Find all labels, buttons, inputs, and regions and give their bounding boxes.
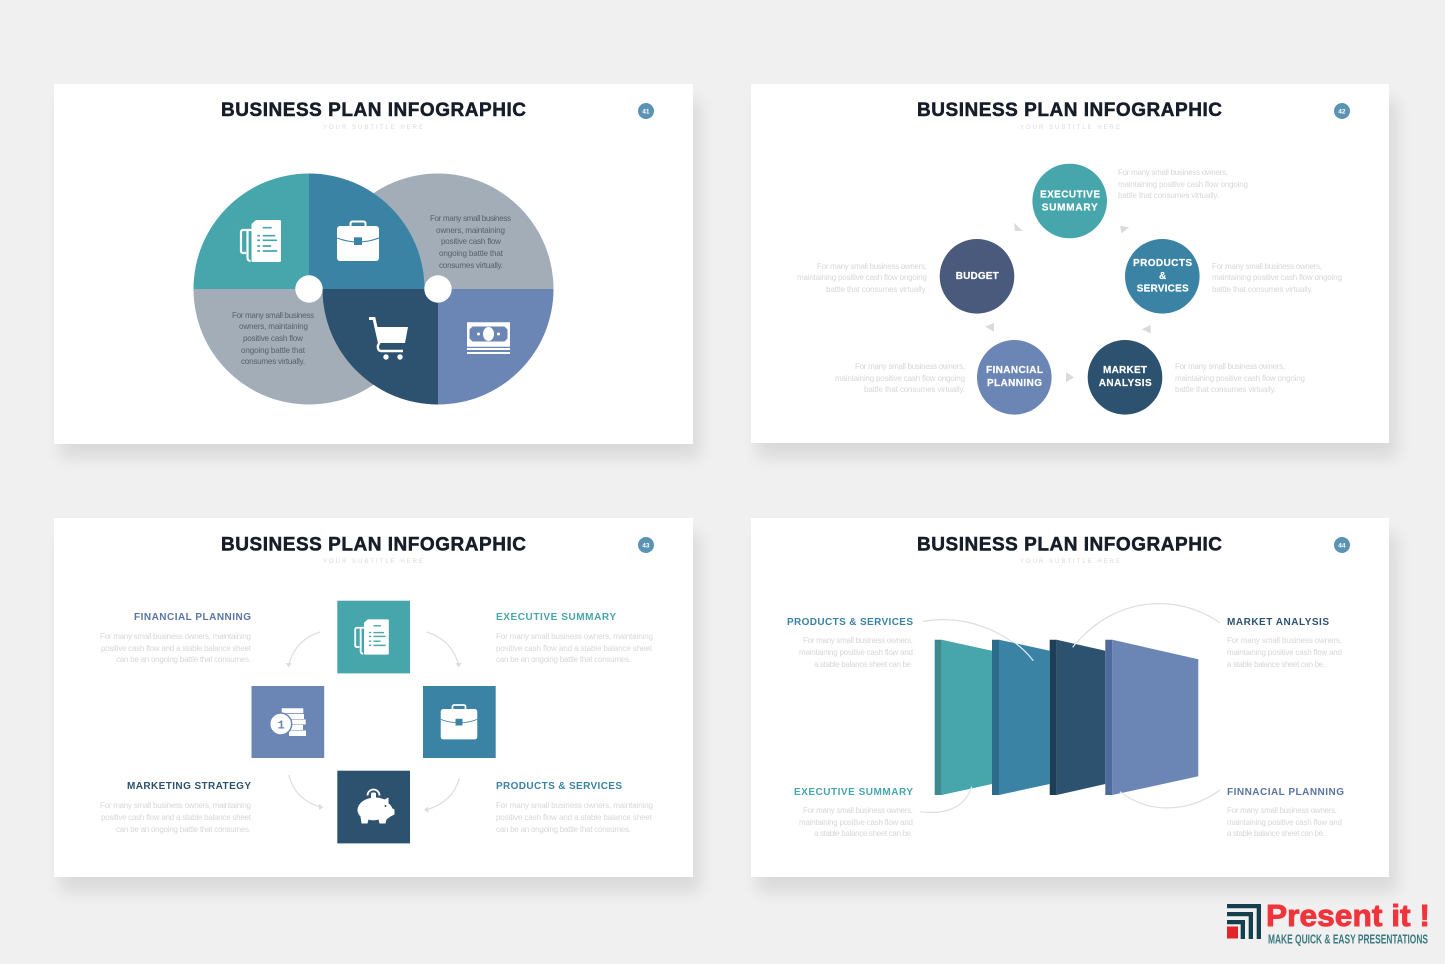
logo mark [1227,904,1261,939]
block: financial planning: For many small business owners, [1227,806,1337,815]
segment: right grey [322,174,554,289]
icon: briefcase [337,222,379,261]
subtitle: YOUR SUBTITLE HERE [323,125,423,131]
page number [1334,103,1350,119]
block: financial planning: maintaining positive cash flow and [1227,818,1342,827]
logo: present it [1227,898,1430,946]
text block: right: ongoing battle that [439,249,504,258]
block: marketing strategy: MARKETING STRATEGY [127,781,251,792]
segment: left grey [194,289,424,404]
panel: cycle slide 42 [751,84,1389,443]
text block: left: positive cash flow [243,334,303,343]
text block: left: consumes virtually. [241,357,305,366]
square: piggy bank [337,771,410,843]
page number [1334,537,1350,553]
node: executive summary [1032,164,1107,238]
node: executive summary: SUMMARY [1042,202,1098,214]
icon: money [467,322,510,353]
block: executive summary: For many small business owners, [803,806,913,815]
arrow: top right [427,632,462,668]
block: executive summary: EXECUTIVE SUMMARY [496,612,616,623]
block: products and services [787,617,913,669]
node: financial planning [977,340,1052,415]
block: financial planning: can be an ongoing battle that consumes. [116,655,251,664]
center dot left [295,275,323,303]
text: financial: battle that consumes virtually. [864,385,965,394]
block: executive summary: a stable balance sheet can be. [814,829,913,838]
3d panels [935,640,1198,795]
logo wordmark: Present it ! [1266,898,1430,933]
title: BUSINESS PLAN INFOGRAPHIC [221,100,526,121]
block: marketing strategy: For many small business owners, maintaining [100,801,251,810]
node: executive summary: EXECUTIVE [1040,190,1100,200]
arrow: products from market [1142,325,1151,333]
icon: cart [369,318,408,360]
segment: blue quadrant [438,289,554,404]
block: market analysis: maintaining positive cash flow and [1227,648,1342,657]
text: products: battle that consumes virtually. [1212,285,1313,294]
block: products and services: maintaining positive cash flow and [799,648,913,657]
panel: squares slide 43 [54,518,693,877]
text block: right [430,214,511,270]
block: products and services: can be an ongoing battle that consumes. [496,825,631,834]
panel: periwinkle [1105,640,1198,795]
page number [638,103,654,119]
block: financial planning [100,612,252,664]
block: executive summary [496,612,653,664]
block: executive summary: can be an ongoing battle that consumes. [496,655,631,664]
segment: mid blue quadrant [309,174,424,289]
text: budget: battle that consumes virtually. [826,285,927,294]
text: market: maintaining positive cash flow ongoing [1175,374,1305,383]
text: financial: maintaining positive cash flow ongoing [835,374,965,383]
block: products and services: positive cash flow and a stable balance sheet [496,813,653,822]
block: executive summary [794,787,913,838]
node: market analysis: ANALYSIS [1099,378,1152,389]
text: market: For many small business owners, [1175,362,1285,371]
node: budget: BUDGET [956,271,999,282]
text block: left [232,311,314,366]
panel: dark [1050,640,1105,795]
panel: panels slide 44 [751,518,1389,877]
node: financial planning: PLANNING [987,378,1042,389]
text: executive: battle that consumes virtually. [1118,191,1219,200]
title: BUSINESS PLAN INFOGRAPHIC [917,100,1222,121]
block: products and services [496,781,653,834]
block: products and services: PRODUCTS & SERVICES [787,617,913,628]
subtitle: YOUR SUBTITLE HERE [323,559,423,565]
block: market analysis: For many small business owners, [1227,636,1342,645]
square: document [337,601,410,673]
arrow: financial to budget [985,323,994,332]
block: products and services: For many small business owners, maintaining [496,801,653,810]
block: executive summary: positive cash flow and a stable balance sheet [496,644,653,653]
square: coins [252,686,324,758]
block: financial planning: FINANCIAL PLANNING [134,612,251,623]
text: products [1212,262,1342,294]
block: financial planning [1227,787,1344,838]
panel: mid blue [992,640,1050,795]
node: products and services: PRODUCTS [1133,258,1192,269]
block: executive summary: For many small business owners, maintaining [496,632,653,641]
text: executive: maintaining positive cash flow ongoing [1118,180,1248,189]
text block: right: consumes virtually. [439,261,503,270]
block: marketing strategy: positive cash flow and a stable balance sheet [101,813,252,822]
subtitle: YOUR SUBTITLE HERE [1020,559,1120,565]
page number: 41 [642,108,650,115]
subtitle: YOUR SUBTITLE HERE [1020,125,1120,131]
node: market analysis [1088,340,1162,415]
block: financial planning: positive cash flow and a stable balance sheet [101,644,252,653]
text: products: maintaining positive cash flow ongoing [1212,273,1342,282]
block: financial planning: a stable balance sheet can be. [1227,829,1325,838]
arrow: budget to executive [1014,223,1023,231]
text: market: battle that consumes virtually. [1175,385,1276,394]
block: marketing strategy [100,781,252,834]
square: briefcase [423,686,496,758]
text block: right: owners, maintaining [436,226,505,235]
block: market analysis: a stable balance sheet can be. [1227,660,1325,669]
text: executive [1118,168,1248,200]
page number [638,537,654,553]
center dot right [424,275,452,303]
page number: 42 [1338,108,1346,115]
text: budget: For many small business owners, [817,262,927,271]
block: products and services: PRODUCTS & SERVICES [496,781,622,792]
block: market analysis: MARKET ANALYSIS [1227,617,1329,628]
block: marketing strategy: can be an ongoing battle that consumes. [116,825,251,834]
text: market [1175,362,1305,394]
node: market analysis: MARKET [1103,365,1147,376]
node: products and services [1125,239,1200,314]
text: executive: For many small business owners, [1118,168,1228,177]
text block: right: For many small business [430,214,511,223]
arrow: bottom right [424,778,459,813]
text: budget [797,262,927,294]
segment: teal quadrant [194,174,309,289]
node: budget [940,239,1014,314]
block: executive summary: EXECUTIVE SUMMARY [794,787,913,798]
text: financial: For many small business owners, [855,362,965,371]
block: financial planning: For many small business owners, maintaining [100,632,251,641]
text block: right: positive cash flow [441,237,501,246]
block: executive summary: maintaining positive cash flow and [799,818,913,827]
text block: left: For many small business [232,311,314,320]
arrow: top left [286,632,320,668]
arrow: executive to products [1120,226,1129,233]
block: products and services: a stable balance sheet can be. [814,660,913,669]
segment: dark quadrant [322,289,438,404]
arrow: financial to market [1066,372,1074,382]
node: products and services: & [1159,271,1166,282]
text: financial [835,362,965,394]
page number: 43 [642,542,650,549]
text: budget: maintaining positive cash flow ongoing [797,273,927,282]
panel: teal [935,640,992,795]
slide shadows [60,100,1397,892]
text block: left: owners, maintaining [239,322,308,331]
connector highlights over panels [970,642,1124,795]
text block: left: ongoing battle that [241,346,306,355]
icon: document [241,220,281,262]
block: financial planning: FINNACIAL PLANNING [1227,787,1344,798]
page number: 44 [1338,542,1346,549]
node: financial planning: FINANCIAL [986,365,1043,376]
node: products and services: SERVICES [1137,284,1189,294]
text: products: For many small business owners, [1212,262,1322,271]
block: market analysis [1227,617,1342,669]
title: BUSINESS PLAN INFOGRAPHIC [221,534,526,556]
venn diagram [194,174,554,404]
arrow: bottom left [289,775,324,810]
title: BUSINESS PLAN INFOGRAPHIC [917,534,1222,556]
panel: venn slide 41 [54,84,693,444]
block: products and services: For many small business owners, [803,636,913,645]
connector lines [920,604,1220,812]
